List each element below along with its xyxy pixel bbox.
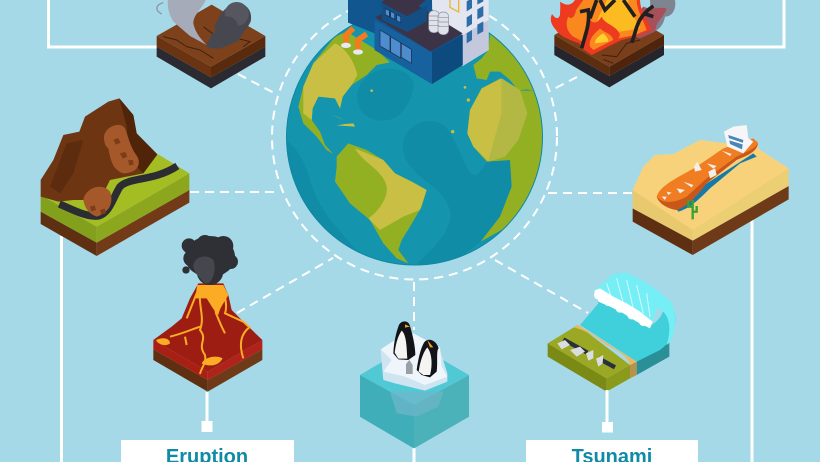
scene: volcano eruption [153,235,262,392]
penguin large [393,321,415,360]
factory on top of globe [341,0,489,84]
ice floe [381,335,447,391]
seabed block [637,343,669,375]
soil block [554,45,664,87]
south america [335,143,427,263]
orange pipes [346,28,367,50]
scene: tsunami [548,273,675,392]
africa [467,78,547,242]
scene: landslide [41,98,189,256]
ground block [41,212,97,256]
eruption connector and marker [202,392,212,432]
small islands [330,86,470,133]
white tower [432,0,489,66]
dashed connector network [190,0,632,330]
coastal road and buildings [563,339,615,367]
north america [298,32,390,154]
lava streams [170,292,249,374]
burnt trees [580,0,653,48]
ground cracks [163,27,250,58]
scene: penguins on iceberg [360,321,469,448]
deck fittings [662,151,732,200]
tsunami connector and marker [602,390,613,432]
label: Tsunami [526,440,698,462]
block layers [153,349,208,392]
globe shading rim [286,9,542,265]
windows [380,9,411,63]
grey smoke [650,0,675,32]
darker ocean patches [283,68,512,270]
brown mountain [41,98,157,202]
silo tanks [429,11,449,35]
scene: wildfire [551,0,675,87]
dust cloud [207,2,251,49]
navy factory hall [348,0,463,84]
road [59,166,177,216]
lava mountain [153,283,262,372]
black roofs [375,0,463,52]
sand block [633,208,693,255]
centre flame [583,17,620,55]
globe [283,9,547,270]
scene: oil tanker on sand [633,125,789,255]
chick [406,360,413,374]
foam crest [594,288,653,328]
main flames [551,0,652,55]
scene: drought and tornado [157,0,265,88]
tanker hull [673,153,757,212]
water cube [360,385,469,448]
tornado [168,0,207,45]
ship bridge [724,125,753,153]
penguin small right [417,340,439,377]
coastal land [548,343,607,392]
wave [580,273,675,362]
cactus [688,200,697,219]
soil block [157,47,265,88]
muted flame [635,7,667,38]
rock debris [83,125,139,217]
submerged ice [390,392,443,417]
europe [473,34,534,90]
ash cloud [182,235,238,285]
label: Eruption [121,440,294,462]
